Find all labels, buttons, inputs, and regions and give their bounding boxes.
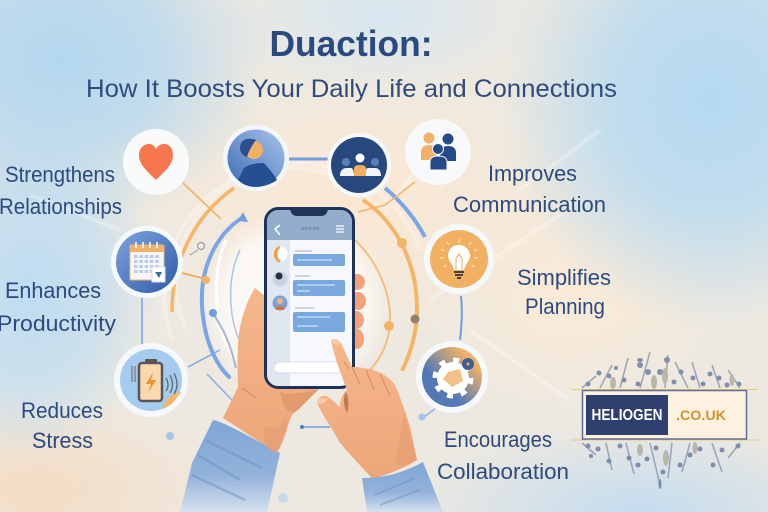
central glow and network arcs [30, 130, 600, 427]
label: enhances productivity [0, 278, 116, 336]
phone: sobsoxh [301, 226, 320, 232]
network nodes [166, 212, 426, 503]
icon: battery [114, 343, 188, 417]
label: strengthens relationships [0, 162, 122, 219]
icon: team [327, 133, 391, 197]
label: strengthens relationships: Relationships [0, 194, 122, 219]
left sleeve [180, 420, 280, 512]
label: enhances productivity: Enhances [5, 278, 101, 303]
label: strengthens relationships: Strengthens [5, 162, 115, 187]
label: encourages collaboration: Encourages [444, 427, 552, 452]
label: encourages collaboration: Collaboration [437, 459, 569, 484]
left hand [223, 288, 330, 453]
right hand [317, 339, 417, 478]
logo: heliogen.co.uk: HELIOGEN [592, 407, 662, 424]
logo: heliogen.co.uk: .CO.UK [676, 407, 726, 423]
label: improves communication: Communication [453, 192, 606, 217]
subtitle: How It Boosts Your Daily Life and Connections [86, 75, 617, 103]
label: reduces stress [21, 398, 103, 453]
icon: gear [416, 341, 488, 413]
label: improves communication [453, 161, 606, 217]
icon: light bulb [424, 224, 494, 294]
phone [266, 208, 354, 388]
input field [274, 362, 342, 373]
label: improves communication: Improves [488, 161, 577, 186]
label: reduces stress: Reduces [21, 398, 103, 423]
logo: heliogen.co.uk [571, 352, 758, 489]
foliage below logo [582, 442, 740, 489]
title: Duaction: [270, 23, 432, 64]
label: encourages collaboration [437, 427, 569, 484]
icon: people group [405, 119, 471, 185]
right sleeve [362, 462, 443, 512]
chat sidebar [267, 240, 290, 386]
label: simplifies planning: Simplifies [517, 265, 611, 290]
icon: heart [123, 129, 189, 195]
icon: person with headset [223, 125, 289, 191]
icon: calendar [111, 226, 183, 298]
label: simplifies planning: Planning [525, 294, 605, 319]
label: reduces stress: Stress [32, 428, 93, 453]
label: enhances productivity: Productivity [0, 311, 116, 336]
avatars [272, 246, 288, 310]
label: simplifies planning [517, 265, 611, 319]
foliage above logo [582, 352, 742, 389]
chat bubbles [293, 251, 345, 332]
phone header [267, 210, 352, 240]
right-side fingers [348, 274, 366, 349]
benefit labels [0, 161, 611, 484]
